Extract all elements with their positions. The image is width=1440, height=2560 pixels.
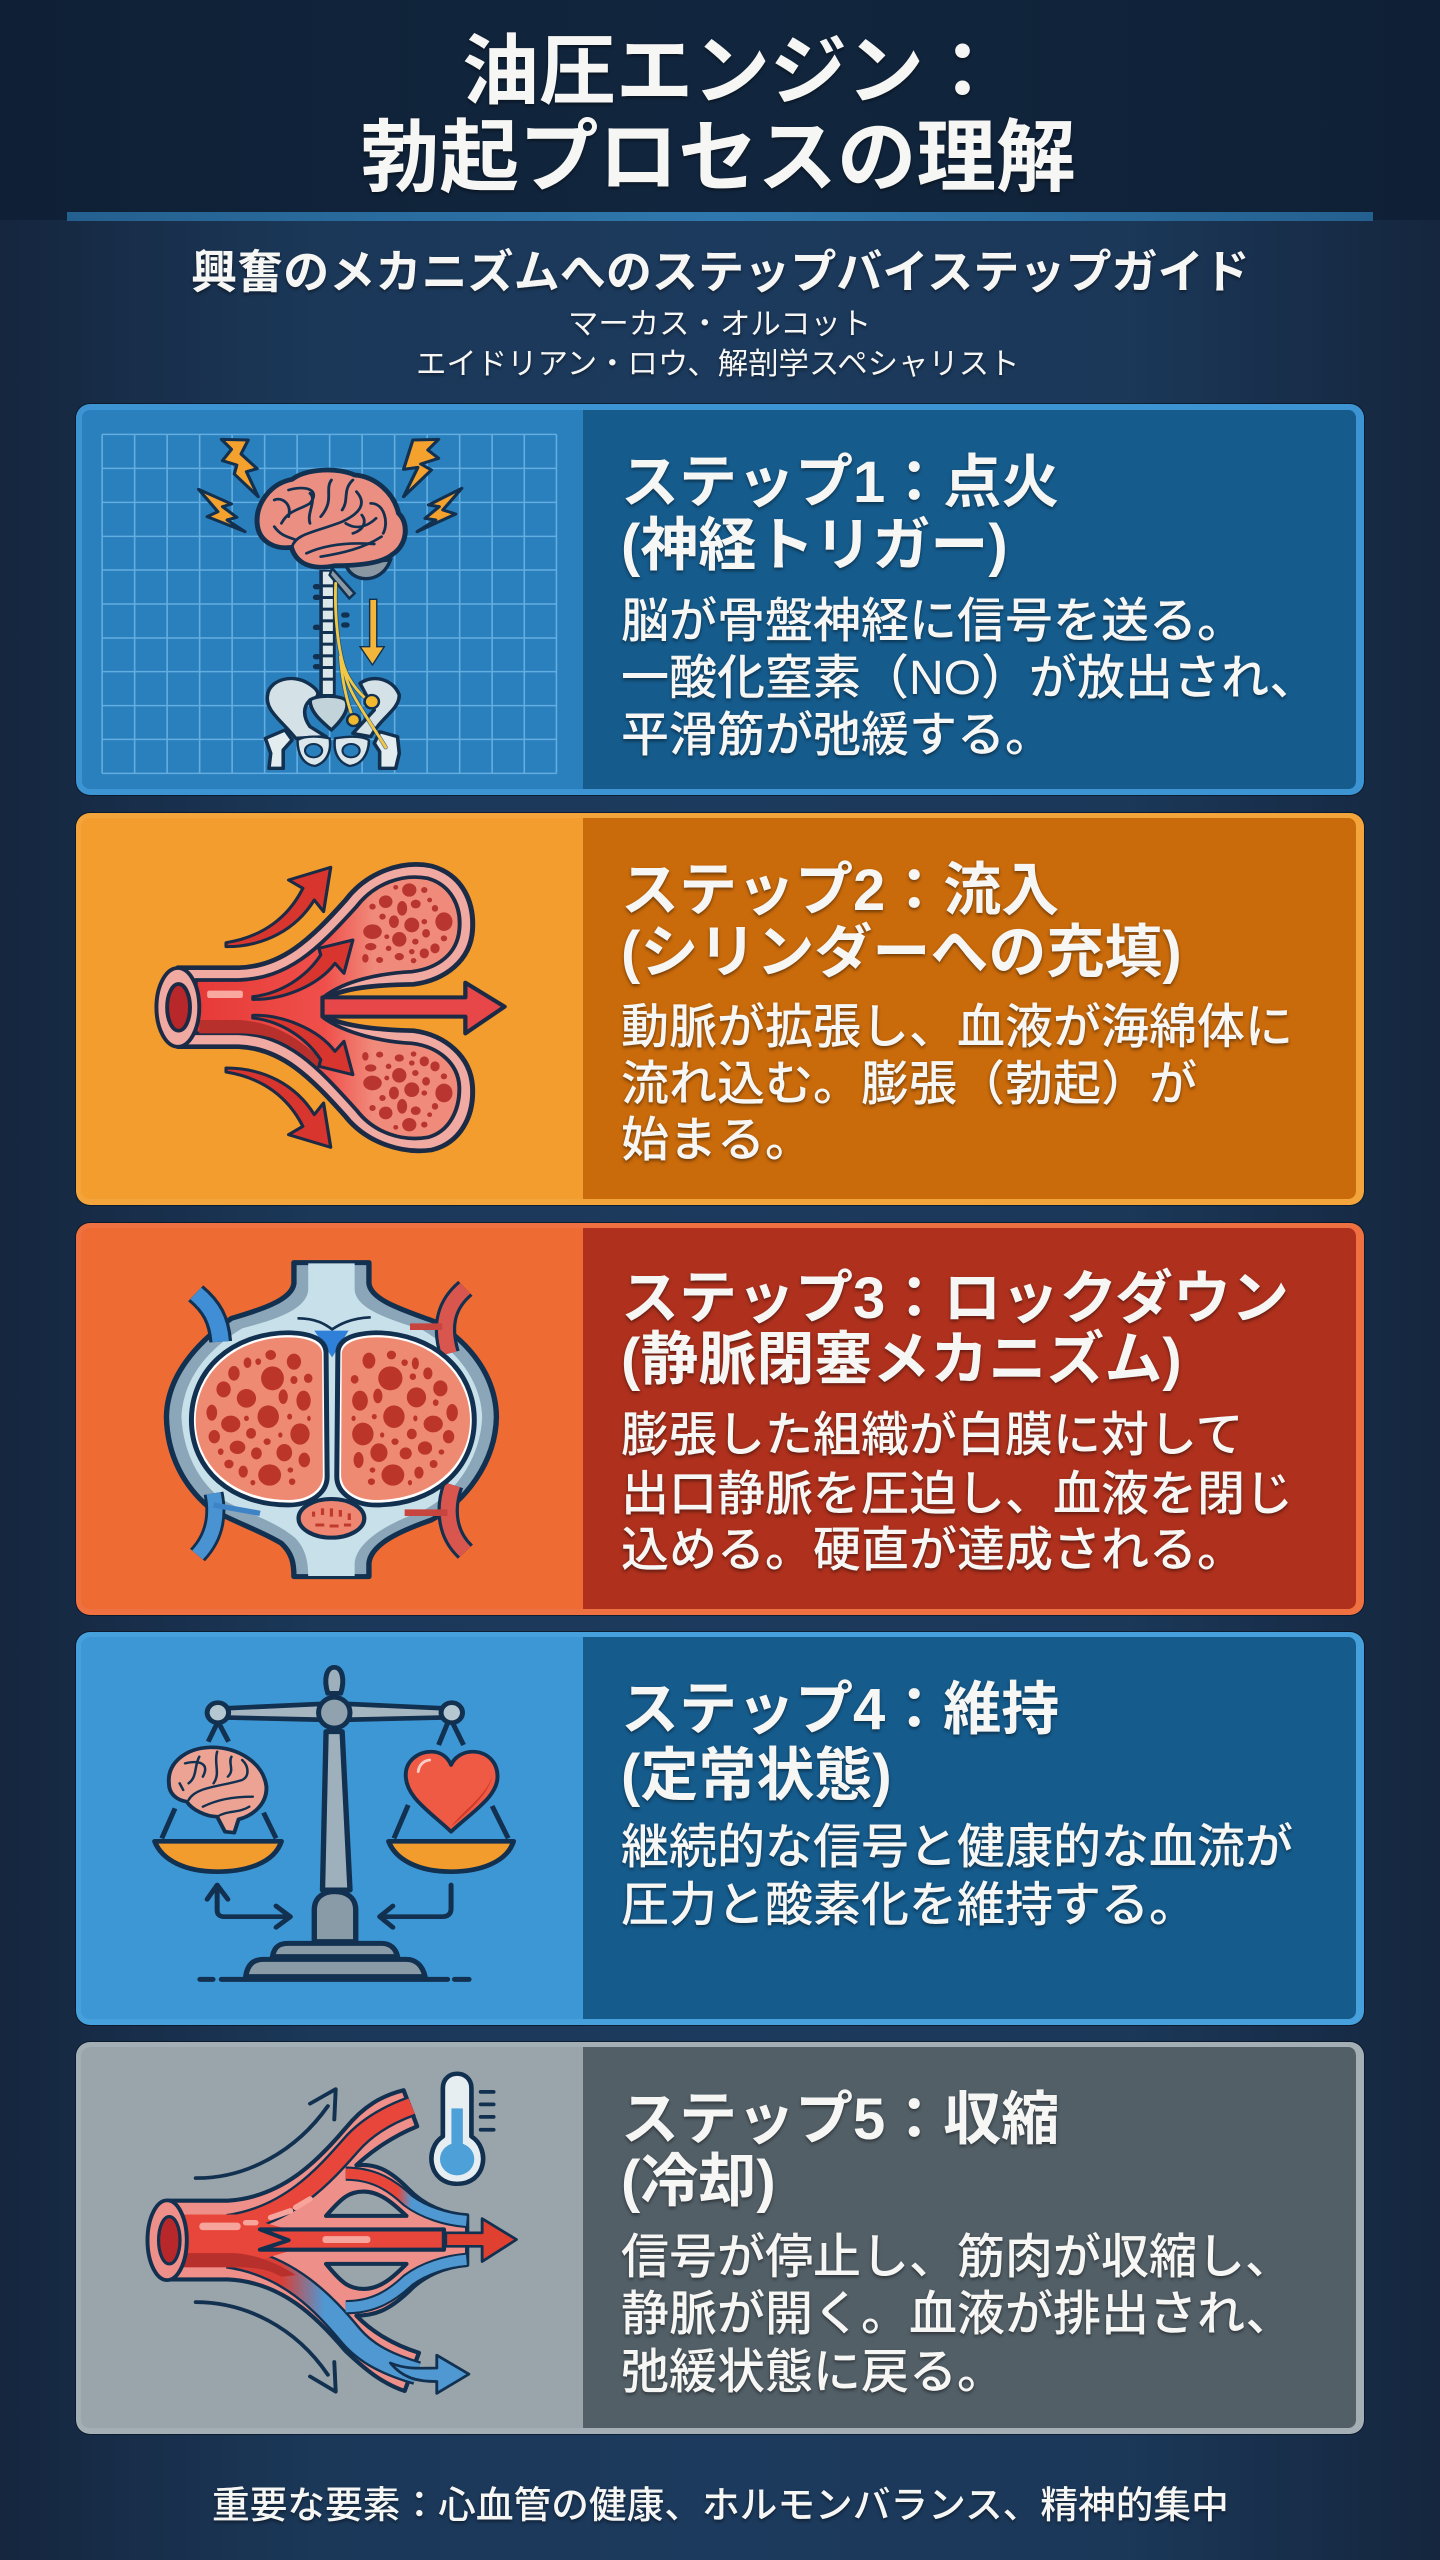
title: 油圧エンジン： bbox=[462, 29, 1001, 115]
step 3 text: 込める。硬直が達成される。 bbox=[621, 1524, 1245, 1577]
step 4 text: (定常状態) bbox=[621, 1743, 892, 1808]
step 5 text bbox=[621, 2087, 1293, 2399]
panel: step 5 bbox=[76, 2042, 1364, 2434]
gaps between vessels bbox=[326, 2192, 406, 2289]
illustration: cross-section veno-occlusion bbox=[164, 1260, 500, 1580]
step 3 text bbox=[621, 1266, 1293, 1577]
pelvis bbox=[265, 679, 399, 768]
step 4 text: ステップ4：維持 bbox=[621, 1677, 1059, 1742]
text panel: step 1 background bbox=[583, 410, 1356, 789]
header divider bbox=[67, 212, 1373, 221]
step 1 text: (神経トリガー) bbox=[621, 513, 1008, 578]
spine bbox=[316, 568, 355, 698]
corpus spongiosum bbox=[299, 1499, 364, 1538]
brain bbox=[257, 470, 405, 579]
step 1 text: ステップ1：点火 bbox=[621, 450, 1059, 515]
right corpus cavernosum bbox=[337, 1333, 474, 1505]
arrow: central outflow bbox=[446, 2219, 516, 2262]
arrow: venous outflow bbox=[390, 2355, 469, 2393]
footer: key factors: 重要な要素：心血管の健康、ホルモンバランス、精神的集中 bbox=[212, 2484, 1229, 2526]
veins bbox=[196, 1288, 465, 1555]
step 5 text: (冷却) bbox=[621, 2149, 776, 2214]
scale beam bbox=[162, 1667, 508, 1838]
step 3 text: 出口静脈を圧迫し、血液を閉じ bbox=[621, 1468, 1293, 1521]
illustration: balance scale with brain and heart bbox=[152, 1665, 516, 1982]
step 3 text: (静脈閉塞メカニズム) bbox=[621, 1327, 1182, 1392]
illustration: artery inflow to chambers bbox=[154, 862, 507, 1154]
step 5 text: 静脈が開く。血液が排出され、 bbox=[621, 2288, 1293, 2341]
illustration: vessels draining and thermometer bbox=[146, 2072, 518, 2395]
step 4 text: 圧力と酸素化を維持する。 bbox=[621, 1879, 1197, 1932]
arterial lumens bbox=[228, 2106, 466, 2373]
feedback arrows bbox=[207, 1885, 451, 1927]
heart bbox=[406, 1752, 498, 1832]
step 2 text: 動脈が拡張し、血液が海綿体に bbox=[621, 1001, 1293, 1054]
text panel: step 4 background bbox=[583, 1637, 1356, 2019]
step 2 text bbox=[621, 858, 1293, 1167]
central blue vein bbox=[314, 1331, 349, 1357]
vessel outer wall bbox=[178, 864, 473, 1151]
panel: step 3 bbox=[76, 1223, 1364, 1615]
lumen lower shading bbox=[199, 1020, 324, 1067]
spongy tissue dots bbox=[362, 883, 452, 1131]
step 4 text bbox=[621, 1677, 1293, 1932]
text panel: step 5 background bbox=[583, 2047, 1356, 2428]
outer flow arrows bbox=[226, 867, 331, 1147]
arrow: signal downward bbox=[360, 599, 384, 665]
vessel lumen and chambers bbox=[196, 877, 460, 1138]
text panel: step 3 background bbox=[583, 1228, 1356, 1609]
nerve pathway bbox=[335, 583, 386, 747]
step 5 text: 弛緩状態に戻る。 bbox=[621, 2346, 1005, 2399]
panel: step 2 bbox=[76, 813, 1364, 1205]
blueprint grid bbox=[102, 434, 556, 773]
left corpus cavernosum bbox=[191, 1333, 327, 1505]
step 2 text: (シリンダーへの充填) bbox=[621, 920, 1182, 985]
pan right bbox=[389, 1841, 514, 1872]
thermometer bbox=[431, 2074, 494, 2184]
step 1 text: 平滑筋が弛緩する。 bbox=[621, 709, 1053, 762]
step 3 text: 膨張した組織が白膜に対して bbox=[621, 1409, 1244, 1462]
step 5 text: 信号が停止し、筋肉が収縮し、 bbox=[621, 2231, 1293, 2284]
step 2 text: 流れ込む。膨張（勃起）が bbox=[621, 1058, 1197, 1111]
step 1 text: 脳が骨盤神経に信号を送る。 bbox=[621, 595, 1245, 648]
panel: step 4 bbox=[76, 1632, 1364, 2025]
header band bbox=[0, 0, 1440, 220]
step 2 text: 始まる。 bbox=[621, 1114, 813, 1167]
step 5 text: ステップ5：収縮 bbox=[621, 2087, 1059, 2152]
pan left bbox=[155, 1841, 281, 1872]
trunk bbox=[148, 2199, 310, 2280]
vessel opening bbox=[156, 968, 243, 1047]
title: 勃起プロセスの理解 bbox=[360, 113, 1076, 202]
title bbox=[360, 29, 1076, 202]
scale base bbox=[246, 1732, 425, 1977]
vessel silhouette bbox=[167, 2090, 467, 2391]
inner sheath bbox=[181, 1263, 482, 1576]
outer sheath bbox=[166, 1263, 496, 1577]
authors bbox=[416, 307, 1020, 381]
step 3 text: ステップ3：ロックダウン bbox=[621, 1266, 1289, 1331]
central arrow bbox=[322, 983, 505, 1033]
text panel: step 2 background bbox=[583, 818, 1356, 1199]
step 1 text: 一酸化窒素（NO）が放出され、 bbox=[621, 652, 1317, 705]
subtitle: 興奮のメカニズムへのステップバイステップガイド bbox=[191, 246, 1250, 298]
inner flow arrows bbox=[253, 940, 353, 1075]
lightning bolts bbox=[199, 439, 462, 532]
brain bbox=[169, 1747, 266, 1833]
step 2 text: ステップ2：流入 bbox=[621, 858, 1059, 923]
ground line bbox=[200, 1972, 469, 1987]
authors: マーカス・オルコット bbox=[568, 307, 871, 341]
step 4 text: 継続的な信号と健康的な血流が bbox=[621, 1821, 1293, 1874]
step 1 text bbox=[621, 450, 1317, 762]
central vessel bbox=[260, 2229, 444, 2250]
authors: エイドリアン・ロウ、解剖学スペシャリスト bbox=[416, 347, 1020, 381]
illustration: brain, spine and pelvis nerve trigger bbox=[101, 434, 558, 774]
panel: step 1 bbox=[76, 404, 1364, 795]
curved flow arrows bbox=[196, 2089, 336, 2392]
